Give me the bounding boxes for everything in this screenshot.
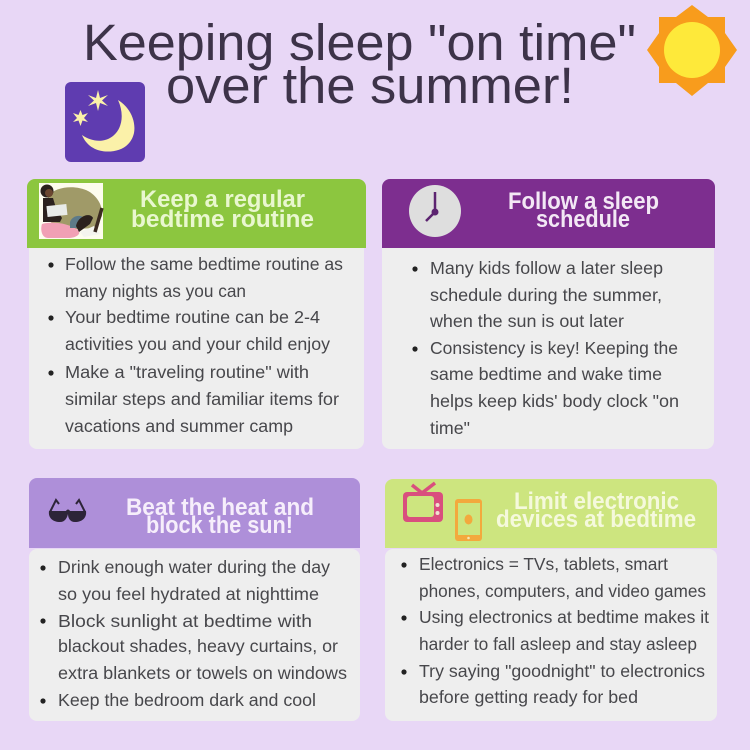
bullet list: Make a "traveling routine" with <box>65 362 309 382</box>
icon: television <box>403 483 443 522</box>
heading <box>126 494 314 539</box>
heading: devices at bedtime <box>496 506 696 533</box>
bullet list: same bedtime and wake time <box>430 364 662 384</box>
heading <box>496 488 696 533</box>
icon: sun <box>647 5 737 96</box>
bullet list: Using electronics at bedtime makes it <box>419 607 709 627</box>
panel body <box>385 549 717 721</box>
panel header <box>385 479 717 548</box>
title: Keeping sleep "on time" <box>83 14 636 71</box>
panel: beat the heat and block the sun <box>29 478 360 721</box>
panel header <box>27 179 366 248</box>
bullet list: Electronics = TVs, tablets, smart <box>419 554 668 574</box>
title <box>83 14 636 114</box>
heading <box>508 188 659 233</box>
bullet list: Your bedtime routine can be 2-4 <box>65 307 320 327</box>
panel header <box>382 179 715 248</box>
bullet list: Keep the bedroom dark and cool <box>58 690 316 710</box>
icon: parent reading to child <box>39 183 103 239</box>
bullet list: harder to fall asleep and stay asleep <box>419 634 697 654</box>
bullet list: Many kids follow a later sleep <box>430 258 663 278</box>
panel header <box>29 478 360 548</box>
panel body <box>382 240 714 449</box>
bullet list: when the sun is out later <box>429 311 624 331</box>
bullet list <box>401 554 709 707</box>
bullet list: before getting ready for bed <box>419 687 638 707</box>
bullet list: Follow the same bedtime routine as <box>65 254 343 274</box>
bullet list <box>40 557 347 710</box>
heading: Follow a sleep <box>508 188 659 215</box>
icon: moon and stars <box>65 82 145 162</box>
heading: Limit electronic <box>514 488 679 515</box>
heading: bedtime routine <box>131 206 314 233</box>
title: over the summer! <box>166 57 574 114</box>
panel: limit electronic devices at bedtime <box>385 479 717 721</box>
heading: schedule <box>536 206 630 233</box>
bullet list: time" <box>430 418 470 438</box>
panel: follow a sleep schedule <box>382 179 715 449</box>
bullet list: helps keep kids' body clock "on <box>430 391 679 411</box>
panel body <box>29 240 364 449</box>
bullet list: Drink enough water during the day <box>58 557 330 577</box>
bullet list: vacations and summer camp <box>65 416 293 436</box>
bullet list: blackout shades, heavy curtains, or <box>58 636 338 656</box>
bullet list: extra blankets or towels on windows <box>58 663 347 683</box>
panel body <box>29 549 360 721</box>
heading: Keep a regular <box>140 186 305 213</box>
bullet list: phones, computers, and video games <box>419 581 706 601</box>
heading: Beat the heat and <box>126 494 314 521</box>
bullet list <box>48 254 343 436</box>
bullet list: similar steps and familiar items for <box>65 389 339 409</box>
bullet list: Consistency is key! Keeping the <box>430 338 678 358</box>
bullet list: many nights as you can <box>65 281 246 301</box>
bullet list: Try saying "goodnight" to electronics <box>419 661 705 681</box>
panel: keep a regular bedtime routine <box>27 179 366 449</box>
icon: sunglasses <box>49 500 86 522</box>
bullet list: so you feel hydrated at nighttime <box>58 584 319 604</box>
icon: clock <box>409 185 461 237</box>
bullet list <box>412 258 679 438</box>
heading: block the sun! <box>146 512 293 539</box>
bullet list: schedule during the summer, <box>430 285 662 305</box>
bullet list: Block sunlight at bedtime with <box>58 611 312 631</box>
icon: tablet <box>455 499 482 541</box>
bullet list: activities you and your child enjoy <box>65 334 330 354</box>
heading <box>131 186 314 233</box>
